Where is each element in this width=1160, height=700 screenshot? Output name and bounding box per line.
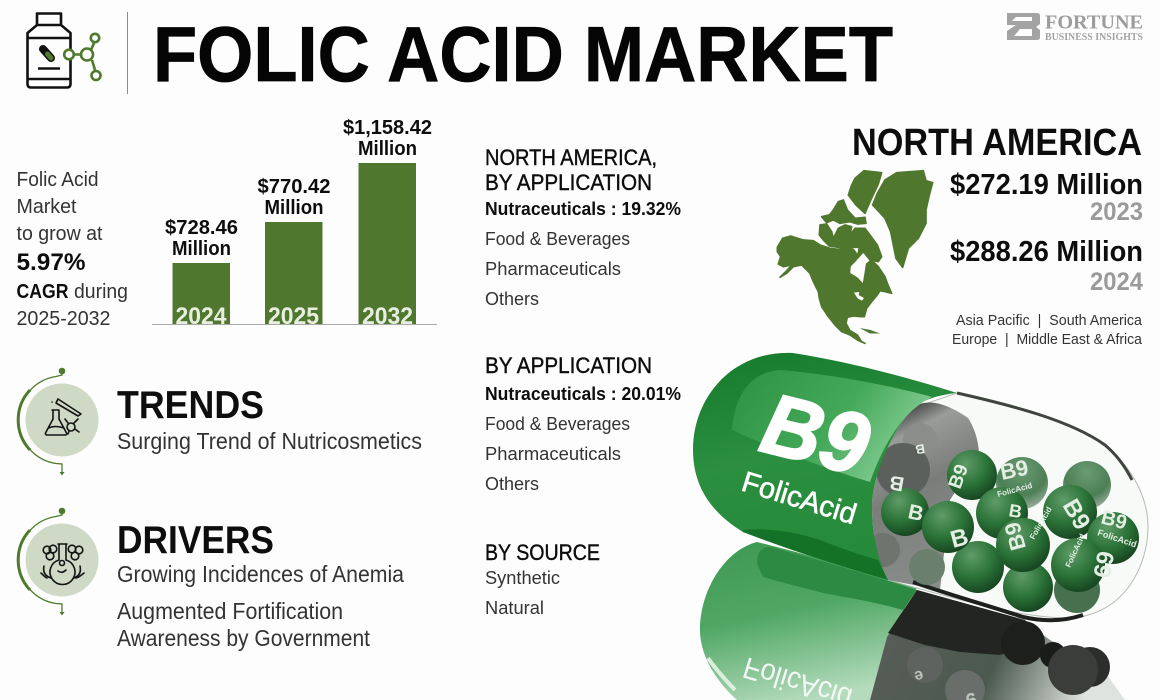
CAGR text block: to grow at (16, 223, 103, 245)
panel: by application (485, 353, 681, 494)
bar 2032: $1,158.42 (343, 117, 432, 139)
bar 2024: $728.46 (165, 217, 238, 239)
spheres: 69 (1087, 549, 1119, 580)
CAGR text block: Market (16, 196, 77, 218)
panel: by source (485, 540, 600, 618)
logo: Fortune Business Insights (1007, 12, 1143, 43)
bar 2032: 2032 (362, 303, 413, 330)
spheres: FolicAcid (1028, 505, 1054, 541)
icon: flask and leaves (18, 508, 99, 616)
panel: by source: BY SOURCE (485, 540, 600, 565)
panel: by application: Food & Beverages (485, 414, 630, 434)
bar 2024 (165, 217, 238, 330)
panel: North America values: 2024 (1090, 268, 1143, 296)
panel: North America values: 2023 (1090, 198, 1143, 226)
CAGR text block: 2025-2032 (16, 308, 110, 330)
panel: by source: Synthetic (485, 568, 560, 588)
panel: by application: Others (485, 474, 539, 494)
spheres: FolicAcid (1096, 527, 1138, 549)
heading: trends: TRENDS (117, 384, 264, 427)
panel: North America by application: BY APPLICATION (485, 170, 652, 195)
capsule reflection (700, 542, 1125, 700)
heading: drivers: DRIVERS (117, 519, 274, 562)
icon: lab flask and molecule (18, 368, 99, 476)
panel: North America values (852, 122, 1143, 296)
bar 2024: Million (172, 238, 231, 260)
text: driver details: Growing Incidences of Anemia (117, 561, 404, 587)
CAGR text block: during (74, 281, 128, 303)
CAGR text block: CAGR (16, 281, 69, 303)
panel: by source: Natural (485, 598, 544, 618)
text: other regions: Asia Pacific | South America (956, 312, 1143, 329)
image: B9 folic acid capsule (693, 353, 1148, 620)
bar 2024: 2024 (176, 303, 227, 330)
spheres: B9 (998, 455, 1031, 485)
logo: Fortune Business Insights: BUSINESS INSIGHTS (1045, 32, 1143, 43)
spheres: B (888, 471, 906, 495)
bar 2025: $770.42 (258, 176, 330, 198)
capsule label: FolicAcid: FolicAcid (738, 466, 860, 531)
panel: North America by application: Nutraceuticals : 19.32% (485, 199, 681, 219)
spheres: B (948, 523, 971, 554)
spheres: B9 (945, 462, 973, 492)
panel: North America by application: NORTH AMERICA, (485, 145, 657, 170)
spheres: B9 (1099, 507, 1129, 534)
panel: by application: Pharmaceuticals (485, 444, 621, 464)
text: other regions: Europe | Middle East & Africa (952, 331, 1143, 348)
capsule highlight band (732, 370, 932, 482)
spheres: B9 (1057, 494, 1096, 535)
title: FOLIC ACID MARKET (153, 10, 893, 98)
capsule lower shadow (743, 529, 888, 580)
spheres: B9 (999, 520, 1031, 553)
icon: supplement bottle with molecule (28, 14, 100, 88)
bar 2025 (258, 176, 330, 330)
spheres: B (1007, 500, 1024, 522)
capsule clear shell (880, 393, 1148, 618)
spheres: B (914, 441, 926, 457)
text: driver details: Augmented Fortification (117, 598, 343, 624)
spheres: FolicAcid (1064, 532, 1087, 569)
text: driver details (117, 561, 404, 651)
spheres: FolicAcid (996, 481, 1033, 499)
panel: North America by application: Pharmaceuticals (485, 259, 621, 279)
bar 2025: 2025 (268, 303, 319, 330)
panel: trends (18, 368, 422, 476)
panel: North America values: $272.19 Million (950, 169, 1143, 201)
panel: North America by application (485, 145, 681, 309)
panel: North America values: $288.26 Million (950, 236, 1143, 268)
CAGR text block: Folic Acid (16, 169, 98, 191)
panel: by application: BY APPLICATION (485, 353, 652, 378)
capsule green shell (693, 353, 957, 580)
bar 2032 (343, 117, 432, 330)
CAGR text block (16, 169, 128, 330)
logo: Fortune Business Insights: FORTUNE (1045, 12, 1143, 34)
panel: drivers (18, 508, 404, 651)
panel: by application: Nutraceuticals : 20.01% (485, 384, 681, 404)
text: driver details: Awareness by Government (117, 625, 371, 651)
capsule label: B9: B9 (752, 375, 879, 494)
text: trend detail: Surging Trend of Nutricosmetics (117, 428, 422, 454)
spheres: B (906, 500, 926, 526)
bar 2032: Million (358, 138, 417, 160)
CAGR text block: 5.97% (16, 249, 86, 276)
bar chart (152, 117, 437, 330)
capsule inner shading (872, 403, 979, 590)
bar 2025: Million (264, 197, 324, 219)
map: North America (777, 171, 933, 343)
capsule reflection: e (912, 666, 925, 685)
spheres (866, 423, 1139, 613)
panel: North America by application: Food & Beverages (485, 229, 630, 249)
text: other regions (952, 312, 1143, 348)
panel: North America by application: Others (485, 289, 539, 309)
